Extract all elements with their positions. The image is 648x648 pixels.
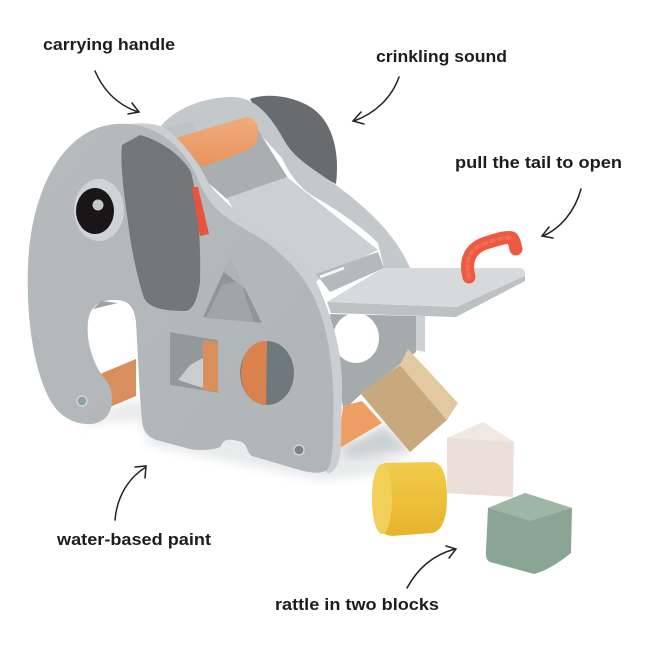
front panel body bbox=[28, 124, 333, 473]
hole: triangle interior bbox=[203, 258, 262, 323]
wooden block bbox=[360, 349, 458, 452]
label: rattle in two blocks: rattle in two blocks bbox=[275, 596, 439, 614]
toy shadow bbox=[75, 400, 420, 480]
top slide panel bbox=[227, 177, 378, 300]
back panel bbox=[160, 97, 410, 268]
top handle rod bbox=[175, 117, 258, 167]
hole: circle interior bbox=[240, 341, 294, 405]
red tag bbox=[192, 187, 209, 236]
hinge bbox=[316, 252, 384, 292]
hole: square interior bbox=[170, 332, 218, 393]
screw right bbox=[294, 445, 304, 455]
label: water-based paint: water-based paint bbox=[56, 531, 212, 549]
screw left bbox=[77, 396, 87, 406]
label: crinkling sound: crinkling sound bbox=[376, 48, 507, 66]
block ground shadow bbox=[340, 425, 412, 458]
bottom front rod bbox=[100, 359, 136, 407]
pink triangle block bbox=[447, 422, 514, 497]
green cube block bbox=[486, 493, 572, 574]
back panel inner face bbox=[185, 130, 288, 200]
arrow: tail bbox=[542, 189, 581, 238]
back ear bbox=[250, 96, 337, 184]
arrow: water-based paint bbox=[115, 466, 146, 520]
label: pull the tail to open: pull the tail to open bbox=[455, 154, 622, 172]
metal peg bbox=[166, 122, 196, 138]
eye bbox=[74, 179, 124, 241]
rear hole bbox=[333, 313, 379, 363]
front panel rim bbox=[130, 123, 342, 474]
label: carrying handle: carrying handle bbox=[43, 36, 175, 54]
elephant toy bbox=[28, 96, 525, 474]
ear bbox=[121, 135, 200, 311]
orange bottom rear rod bbox=[338, 401, 382, 449]
sliding tray bbox=[327, 268, 525, 317]
arrow: crinkling sound bbox=[353, 77, 399, 124]
arrow: rattle blocks bbox=[407, 546, 456, 588]
tail rope bbox=[468, 237, 516, 277]
rear inner wall bbox=[330, 314, 416, 410]
trunk hole shading bbox=[93, 301, 118, 309]
arrow: carrying handle bbox=[95, 71, 139, 114]
yellow cylinder block bbox=[372, 462, 447, 536]
